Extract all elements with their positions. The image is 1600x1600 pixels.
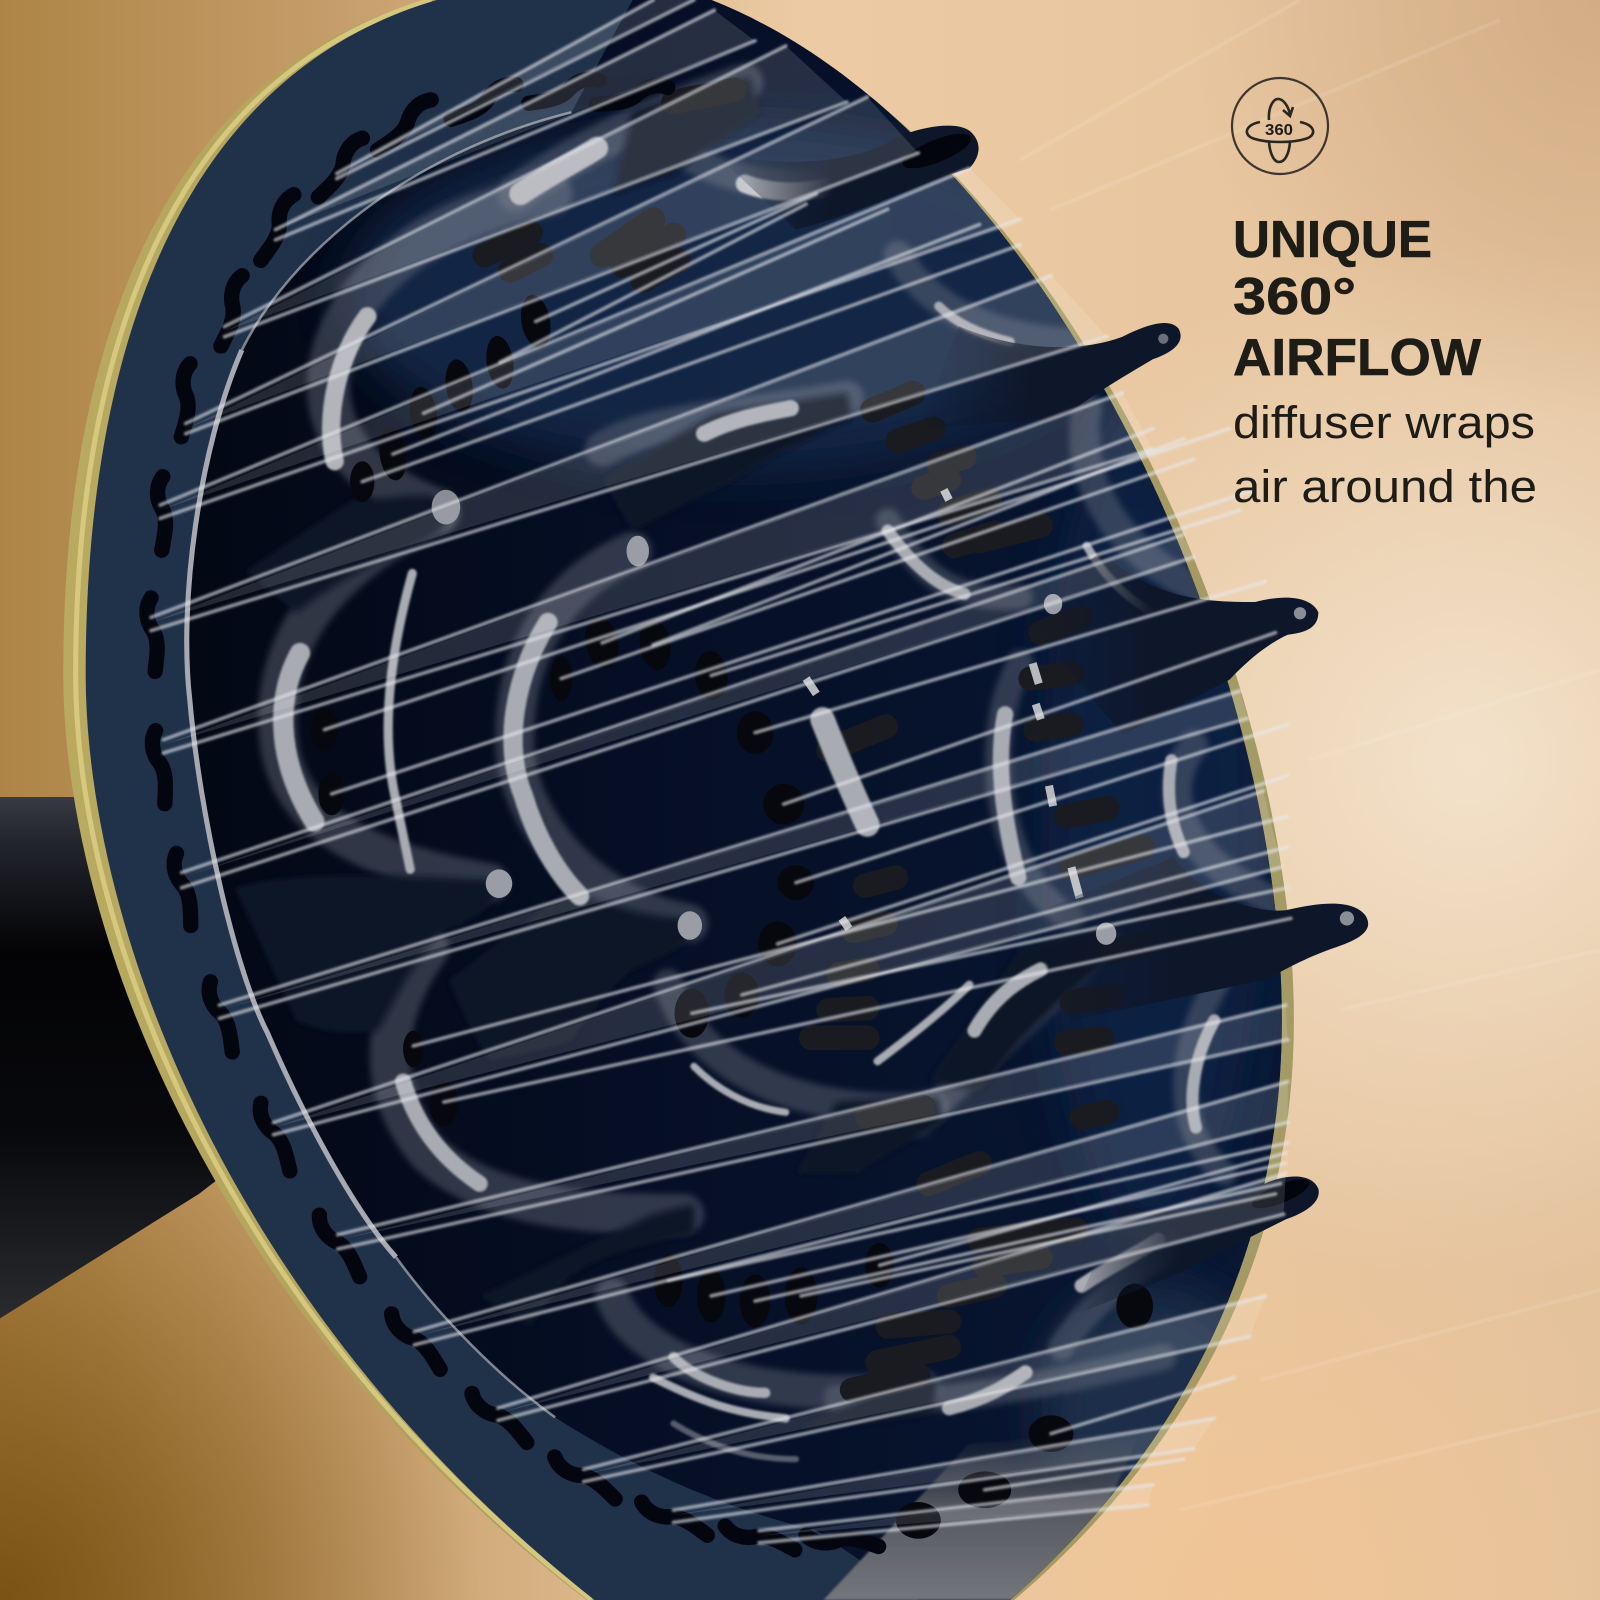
- dryer handle: [0, 797, 265, 1318]
- prong arms: [235, 77, 1122, 1429]
- inner dish: [184, 0, 1282, 1600]
- icon: 360 degree airflow: [1232, 78, 1328, 174]
- slate outer disc: [86, 0, 1282, 1600]
- body text: diffuser wraps: [1233, 397, 1535, 448]
- navy lower right glow: [1032, 1278, 1223, 1502]
- prong tips: [432, 127, 1354, 1214]
- airflow wedges: [151, 0, 1288, 1536]
- heading: UNIQUE: [1233, 211, 1432, 269]
- outer prong silhouettes: [714, 126, 1368, 1316]
- navy right glow: [1041, 388, 1265, 1245]
- translucent loops: [278, 82, 1347, 1401]
- heading: AIRFLOW: [1233, 329, 1482, 387]
- rim highlight: [76, 0, 592, 1600]
- pill-shaped air slots: [485, 90, 1148, 1390]
- heading: [1233, 211, 1482, 387]
- translucent centre stalk: [823, 1440, 1131, 1600]
- icon: 360 degree airflow: 360: [1265, 122, 1293, 139]
- centre round air holes: [311, 293, 1153, 1539]
- body text: [1233, 397, 1537, 512]
- white ring on disc: [187, 350, 396, 1257]
- body text: air around the: [1233, 461, 1537, 512]
- gold rim: [63, 0, 1294, 1600]
- perimeter air slots: [147, 76, 879, 1557]
- airflow streak lines: [151, 0, 1291, 1543]
- heading: 360°: [1233, 268, 1356, 326]
- navy upper glow: [347, 122, 1122, 469]
- ring upper and lower arcs: [242, 112, 571, 1417]
- bright notches beside slots: [806, 490, 1080, 929]
- glossy crescent highlights: [283, 148, 1214, 1459]
